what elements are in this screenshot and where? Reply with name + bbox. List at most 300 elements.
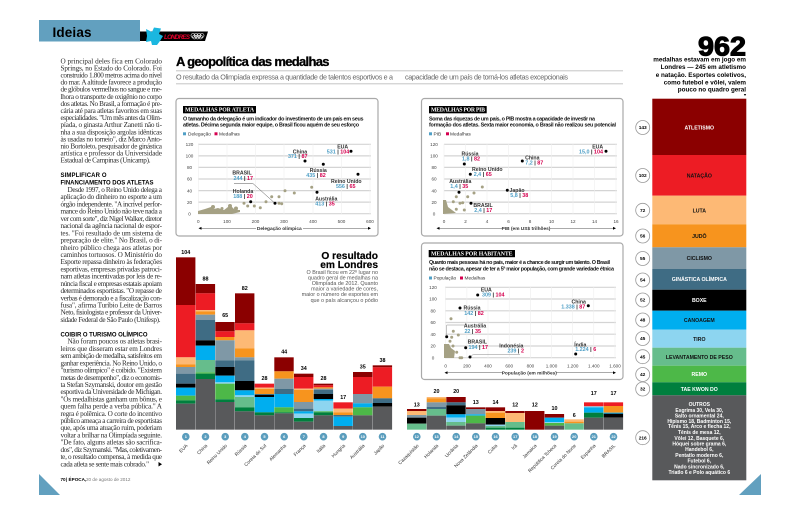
body text: first block <box>60 57 163 165</box>
scatter chart: delegation vs medals: 600 <box>366 219 374 224</box>
bar: Cazaquistão <box>407 409 426 430</box>
subtitle band: capacidade de um país de torná-los atletas excepcionais <box>405 72 568 82</box>
body text: third block: leiros que disseram estar em Londres <box>60 345 162 353</box>
sport medal count circles: 42 <box>640 372 646 378</box>
legend: Medalhas <box>464 276 486 282</box>
country labels: Holanda <box>423 443 440 460</box>
legend: Medalhas <box>450 131 471 137</box>
scatter chart: population vs medals: 1.600 <box>609 363 621 368</box>
bar totals: 10 <box>552 406 558 412</box>
body text: second block: caminhos tortuosos. O Ministério do <box>60 251 162 259</box>
body text: first block: às usadas no torneio", diz Marco Anto- <box>60 135 163 143</box>
scatter chart: delegation vs medals <box>186 142 374 224</box>
corner triangle right <box>739 474 761 495</box>
footer: page number and date: | ÉPOCA, <box>66 475 86 482</box>
bar totals: 34 <box>301 366 307 372</box>
rank circles: 2 <box>204 434 207 439</box>
segment: canoagem: CANOAGEM <box>684 318 715 324</box>
segment: remo <box>652 366 746 382</box>
scatter chart: population vs medals: 0 <box>432 355 435 360</box>
footer: page number and date: 20 de agosto de 2012 <box>86 477 131 482</box>
country labels: Coreia do Norte <box>550 443 578 471</box>
bar: Hungria <box>333 402 353 430</box>
bar totals: 13 <box>473 400 479 406</box>
rank circles: 13 <box>434 434 439 439</box>
scatter chart: population vs medals: 100 <box>429 297 437 302</box>
scatter chart: GDP vs medals: 60 <box>431 177 437 182</box>
segment: natação <box>652 155 746 196</box>
scatter chart: delegation vs medals: 0 <box>188 211 191 216</box>
title: A geopolítica das medalhas <box>176 54 330 69</box>
segment: outros: Tênis de mesa 12, <box>678 430 721 436</box>
heading: O resultado em Londres <box>320 251 378 271</box>
body text: second block: verbas é demorado e a fiscalização con- <box>60 294 163 302</box>
segment: ginástica olímpica <box>652 269 746 290</box>
segment: outros: Hóquei sobre grama 6, <box>672 442 727 448</box>
body text: first block: de glóbulos vermelhos no sangue e me- <box>60 86 163 94</box>
bar: Coreia do Sul <box>255 384 274 430</box>
bar: França <box>294 374 313 430</box>
body text: third block: sem ambição de medalha, satisfeitos em <box>60 352 162 360</box>
bar totals: 17 <box>340 395 346 401</box>
panel: medalhas por PIB <box>422 98 623 236</box>
scatter chart: delegation vs medals: 20 <box>187 200 192 205</box>
body text: second block: preparação de elite." No Brasil, o di- <box>60 236 163 244</box>
segment: outros: Tênis 15, Arco e flecha 12, <box>668 424 731 430</box>
segment: luta: LUTA <box>693 208 706 214</box>
scatter chart: delegation vs medals: 500 <box>338 219 346 224</box>
rank circles: 6 <box>283 434 286 439</box>
rank circles: 19 <box>552 434 557 439</box>
country labels: Ucrânia <box>444 443 460 459</box>
panel: medalhas por habitante <box>422 243 623 380</box>
scatter chart: delegation vs medals: Rússia <box>310 168 327 174</box>
bar: Brasil <box>604 402 623 430</box>
sport medal count circles: 56 <box>640 234 646 240</box>
sport medal count circles: 54 <box>640 278 646 284</box>
scatter chart: GDP vs medals: 0 <box>443 219 446 224</box>
scatter chart: GDP vs medals: 6 <box>507 219 510 224</box>
rank circles: 11 <box>380 434 385 439</box>
rank circles: 17 <box>513 434 517 439</box>
bar: Coreia do Norte <box>564 419 584 430</box>
text block: O resultado em Londres: O Brasil ficou em 22º lugar no <box>307 270 378 276</box>
body text: third block: quem falha perde a verba pública." A <box>60 403 163 411</box>
rank circles: 1 <box>185 434 188 439</box>
body text: first block: lhora o transporte de oxigênio no corpo <box>60 93 162 101</box>
body text: first block: nha a sua disposição argolas idênticas <box>60 128 162 136</box>
segment: natação: NATAÇÃO <box>687 172 712 180</box>
body text: third block: regra é polêmica. O corte do incentivo <box>60 410 162 418</box>
scatter chart: GDP vs medals: 10 <box>549 219 554 224</box>
text block: 962 caption: Londres — 245 em atletismo <box>661 64 746 71</box>
scatter chart: population vs medals: 200 <box>463 363 471 368</box>
segment: outros: OUTROS <box>689 402 711 408</box>
sport medal count circles: 216 <box>639 435 647 441</box>
body text: second block: tes. "Foi resultado de um sistema de <box>60 229 162 237</box>
body text: second block: determinados esportistas. "O repasse de <box>60 287 162 295</box>
sport medal count circles: 48 <box>640 318 646 324</box>
body text: second block: sidade Federal de São Paulo (Unifesp). <box>60 316 161 324</box>
panel title: MEDALHAS POR PIB <box>431 108 485 114</box>
panel: medalhas por atleta <box>176 98 378 236</box>
bar totals: 17 <box>591 391 597 397</box>
scatter chart: GDP vs medals: 5,8 | 38 <box>510 193 528 199</box>
segment: atletismo <box>652 99 746 155</box>
bar: República Tcheca <box>545 414 564 430</box>
body text: second block: Desde 1997, o Reino Unido delega a <box>68 186 163 194</box>
axis arrow: PIB: PIB (em US$ trilhões) <box>502 226 551 232</box>
scatter chart: population vs medals: 142 | 82 <box>464 311 484 317</box>
segment: atletismo: ATLETISMO <box>685 126 714 132</box>
body text: third block: metas de desempenho", diz o economis- <box>60 374 163 382</box>
body text: third block: "turismo olímpico" é coibido. "Existem <box>60 366 162 374</box>
segment: levantamento de peso <box>652 348 746 366</box>
segment: ciclismo: CICLISMO <box>687 256 712 262</box>
body text: first block: nio Bortoleto, pesquisador de ginástica <box>60 142 163 150</box>
panel description: Quanto mais pessoas há no país, maior é a chance de surgir um talento. O Brasil <box>429 260 610 266</box>
scatter chart: population vs medals: 1.200 <box>567 363 579 368</box>
body text: first block: Estadual de Campinas (Unicamp). <box>60 157 151 165</box>
footer: page number and date <box>60 475 131 482</box>
segment: judô: JUDÔ <box>692 232 707 240</box>
scatter chart: GDP vs medals <box>430 142 619 224</box>
segment: boxe <box>652 290 746 311</box>
segment: outros: Pentatlo moderno 6, <box>675 453 724 459</box>
subheading: Simplificar o financiamento: FINANCIAMENTO DOS ATLETAS <box>60 181 154 187</box>
body text: third block: ta Stefan Szymanski, doutor em gestão <box>60 381 162 389</box>
logo: Londres 2012 ribbon <box>140 28 208 45</box>
country labels: China <box>196 443 209 456</box>
bar totals: 104 <box>181 250 190 256</box>
scatter chart: population vs medals: 22 | 35 <box>464 329 481 335</box>
scatter chart: population vs medals: 60 <box>430 320 436 325</box>
country labels: EUA <box>178 443 190 454</box>
bar: Holanda <box>427 397 446 430</box>
scatter chart: population vs medals: 239 | 2 <box>507 349 524 355</box>
body text: first block: O principal deles fica em Colorado <box>60 57 162 65</box>
bar totals: 20 <box>434 389 440 395</box>
text block: O resultado em Londres: que o país alcançou o pódio <box>311 298 378 304</box>
country labels: Nova Zelândia <box>453 443 480 469</box>
rank circles: 12 <box>415 434 420 439</box>
segment: levantamento de peso: LEVANTAMENTO DE PESO <box>666 355 733 361</box>
panel title: MEDALHAS POR ATLETA <box>185 108 255 114</box>
body text: first block: especialidades. "Um mês antes da Olim- <box>60 114 163 122</box>
rank circles: 10 <box>361 434 365 439</box>
rank circles: 15 <box>474 434 479 439</box>
scatter chart: GDP vs medals: 8 <box>529 219 532 224</box>
scatter chart: GDP vs medals: Japão <box>510 188 524 194</box>
bar totals: 12 <box>532 403 538 409</box>
body text: first block: cária até para atletas favoritos em suas <box>60 107 162 115</box>
sport medal count circles: 32 <box>640 387 646 393</box>
scatter chart: population vs medals: 1.338 | 87 <box>561 305 585 311</box>
country labels: Coreia do Sul <box>243 443 268 468</box>
bar totals <box>414 389 616 419</box>
text block: O resultado em Londres: maior a variedade de cores, <box>311 287 378 293</box>
bar: Irã <box>505 411 525 430</box>
scatter chart: population vs medals: 600 <box>505 363 513 368</box>
legend <box>429 131 471 137</box>
scatter chart: GDP vs medals: 20 <box>431 200 437 205</box>
scatter chart: GDP vs medals: Rússia <box>461 152 479 158</box>
logo: Londres 2012 ribbon: LONDRES <box>164 34 191 41</box>
segment: remo: REMO <box>692 372 707 378</box>
segment: outros: Nado sincronizado 6, <box>674 464 725 470</box>
body text: third block <box>60 338 163 468</box>
body text: first block: dos atletas. No Brasil, a formação é pre- <box>60 100 163 108</box>
segment: outros: Esgrima 30, Vela 30, <box>675 408 724 414</box>
subtitle band <box>176 70 623 84</box>
scatter chart: delegation vs medals: China <box>293 150 307 156</box>
scatter chart: GDP vs medals: 1,4 | 35 <box>450 184 468 190</box>
text block: O resultado em Londres <box>302 270 379 304</box>
heading: O resultado em Londres: em Londres <box>320 260 378 271</box>
body text: first block: artística e professor da Universidade <box>60 150 162 158</box>
scatter chart: delegation vs medals: 200 <box>252 219 260 224</box>
bar: Cuba <box>486 407 505 430</box>
scatter chart: GDP vs medals: 16 <box>613 219 619 224</box>
sport medal count circles: 102 <box>639 173 647 179</box>
scatter chart: delegation vs medals: 80 <box>187 165 192 170</box>
bar: Rússia <box>235 293 254 430</box>
panel description: não se destaca, apesar de ter a 5ª maior população, com grande variedade étnica <box>429 266 615 272</box>
sport medal count circles: 45 <box>640 336 646 342</box>
scatter chart: population vs medals: BRASIL <box>468 340 488 346</box>
bar: Austrália <box>353 372 372 430</box>
country labels: Hungria <box>331 443 347 459</box>
scatter chart: population vs medals: 40 <box>430 332 436 337</box>
footer: page number and date: 70 <box>60 477 66 482</box>
rank circles: 9 <box>342 434 345 439</box>
rank circles <box>413 433 617 441</box>
scatter chart: delegation vs medals: 0 <box>197 219 200 224</box>
legend: Medalhas <box>219 131 240 137</box>
bar totals: 17 <box>610 391 616 397</box>
body text: second block: núncia fiscal e empresas estatais apoiam <box>60 280 162 288</box>
scatter chart: GDP vs medals: 80 <box>431 165 437 170</box>
bar: Espanha <box>584 402 603 430</box>
country labels: França <box>293 443 308 458</box>
body text: second block: Esporte repassa dinheiro às federações <box>60 258 162 266</box>
country labels: Espanha <box>580 443 598 461</box>
body text: third block: Não foram poucos os atletas brasi- <box>68 338 163 346</box>
rank circles: 7 <box>303 434 305 439</box>
body text: second block: órgão independente. "A incrível perfor- <box>60 200 163 208</box>
scatter chart: population vs medals: 1.400 <box>588 363 600 368</box>
scatter chart: delegation vs medals: 100 <box>223 219 231 224</box>
scatter chart: population vs medals: 309 | 104 <box>482 293 505 299</box>
bar totals: 20 <box>453 389 459 395</box>
scatter chart: delegation vs medals: 556 | 65 <box>336 184 355 190</box>
bar: Nova Zelândia <box>466 407 485 430</box>
bar totals: 35 <box>360 364 366 370</box>
sport medal count circles: 143 <box>639 125 647 131</box>
segment: luta <box>652 196 746 224</box>
country labels <box>397 443 617 474</box>
segment: ginástica olímpica: GINÁSTICA OLÍMPICA <box>672 275 727 283</box>
country labels: Austrália <box>349 443 367 461</box>
country labels: Reino Unido <box>206 443 229 466</box>
sport medal count circles: 52 <box>640 298 646 304</box>
bar: Ucrânia <box>446 397 466 430</box>
scatter chart: population vs medals: 400 <box>484 363 492 368</box>
scatter chart: delegation vs medals: 413 | 35 <box>315 202 335 208</box>
bar: Itália <box>314 384 333 430</box>
body text: third block: cada atleta se sente mais cobrado." <box>60 460 149 468</box>
bar totals: 28 <box>262 376 268 382</box>
body text: first block: construído 1.800 metros acima do nível <box>60 72 162 80</box>
bar: Jamaica <box>525 411 544 430</box>
body text: third block: "Os medalhistas ganham um bônus, e <box>60 395 162 403</box>
text block: 962 caption: pouco no quadro geral <box>678 86 746 93</box>
body text: third block: que, após uma atuação ruim, poderiam <box>60 424 162 432</box>
scatter chart: delegation vs medals: 531 | 104 <box>327 150 349 156</box>
scatter chart: delegation vs medals: EUA <box>337 144 348 150</box>
scatter chart: GDP vs medals: 1,8 | 82 <box>462 157 480 163</box>
rank circles: 16 <box>493 434 498 439</box>
scatter chart: population vs medals: 194 | 17 <box>469 345 488 351</box>
segment: outros: Triatlo 6 e Polo aquático 6 <box>668 470 730 476</box>
body text: second block: esportivas, empresas privadas patroci- <box>60 265 163 273</box>
segment: outros: Handebol 6, <box>685 447 714 453</box>
scatter chart: population vs medals: 800 <box>527 363 535 368</box>
section tab: Ideias <box>39 20 140 42</box>
body text: third block: te, o resultado compensa, à medida que <box>60 453 162 461</box>
scatter chart: GDP vs medals: Reino Unido <box>472 167 503 173</box>
scatter chart: population vs medals: EUA <box>481 288 492 294</box>
axis arrow: delegação olímpica: Delegação olímpica <box>257 226 302 232</box>
scatter chart: GDP vs medals: EUA <box>592 144 603 150</box>
axis arrow: população <box>444 370 616 376</box>
scatter chart: GDP vs medals: 120 <box>430 142 438 147</box>
scatter chart: GDP vs medals: 2,4 | 17 <box>474 208 492 214</box>
scatter chart: delegation vs medals: 300 <box>280 219 288 224</box>
rank circles <box>182 433 386 441</box>
panel description <box>183 116 364 128</box>
country labels: República Tcheca <box>527 443 558 474</box>
body text: first block: píada, o ginasta Arthur Zanetti não ti- <box>60 121 163 129</box>
country labels: Irã <box>511 443 519 451</box>
segment: tae kwon do <box>652 382 746 395</box>
country labels: Alemanha <box>268 443 288 463</box>
text block: 962 caption <box>653 56 746 93</box>
rank circles: 22 <box>611 434 616 439</box>
segment: canoagem <box>652 311 746 330</box>
scatter chart: delegation vs medals: 100 <box>186 154 194 159</box>
text block: O resultado em Londres: quadro geral de medalhas na <box>308 276 378 282</box>
scatter chart: delegation vs medals: 120 <box>186 142 194 147</box>
scatter chart: GDP vs medals: 7,2 | 87 <box>525 161 543 167</box>
scatter chart: population vs medals: 1.224 | 6 <box>575 347 596 353</box>
panel description: formação dos atletas. Sexta maior economia, o Brasil não realizou seu potencial <box>429 122 616 128</box>
section tab: Ideias: Ideias <box>52 25 92 40</box>
body text: second block: nacional da agência nacional de espor- <box>60 222 163 230</box>
scatter chart: population vs medals: China <box>571 300 586 306</box>
body text: second block: ver com sorte", diz Nigel Walker, diretor <box>60 215 163 223</box>
scatter chart: population vs medals: Indonésia <box>499 344 524 350</box>
scatter chart: delegation vs medals: 244 | 17 <box>234 176 253 182</box>
scatter chart: population vs medals: 80 <box>430 308 436 314</box>
legend: Delegação <box>188 131 211 137</box>
body text: third block: esportiva da Universidade de Michigan. <box>60 388 162 396</box>
bar totals: 38 <box>380 358 386 364</box>
segment: ciclismo <box>652 247 746 269</box>
scatter chart: GDP vs medals: 14 <box>592 219 597 224</box>
scatter chart: delegation vs medals: 188 | 20 <box>233 194 253 200</box>
country labels: Jamaica <box>522 443 539 460</box>
country labels: Rússia <box>234 443 249 458</box>
segment: judô <box>652 224 746 247</box>
subheading: Simplificar o financiamento <box>60 173 154 187</box>
sport medal count circles: 72 <box>640 208 646 214</box>
axis arrow: população: População (em milhões) <box>502 370 557 376</box>
scatter chart: GDP vs medals: China <box>525 156 540 162</box>
panel description: O tamanho da delegação é um indicador do investimento de um país em seus <box>183 116 364 122</box>
text block: O resultado em Londres: maior o número de esportes em <box>302 292 379 298</box>
bar: China <box>196 284 215 430</box>
scatter chart: delegation vs medals: 40 <box>187 188 192 193</box>
bar totals: 65 <box>222 313 228 319</box>
panel description <box>429 260 615 272</box>
scatter chart: population vs medals: 0 <box>444 363 447 368</box>
rank circles: 18 <box>533 434 538 439</box>
bar totals: 44 <box>281 350 287 356</box>
subheading: Coibir o turismo olímpico: COIBIR O TURISMO OLÍMPICO <box>60 330 148 338</box>
scatter chart: delegation vs medals: Holanda <box>233 189 253 195</box>
body text: second block: mance do Reino Unido não teve nada a <box>60 208 163 216</box>
body text: first block: Springs, no Estado do Colorado. Foi <box>60 64 162 72</box>
body text: third block: dos", diz Szymanski. "Mas, coletivamen- <box>60 446 163 454</box>
scatter chart: population vs medals: 20 <box>430 344 436 349</box>
scatter chart: GDP vs medals: Austrália <box>449 179 472 185</box>
sport medal count circles: 55 <box>640 256 646 262</box>
panel description <box>429 116 616 128</box>
body text: third block: voltar a brilhar na Olimpíada seguinte. <box>60 431 162 439</box>
segment: tae kwon do: TAE KWON DO <box>681 387 718 393</box>
segment: boxe: BOXE <box>692 298 707 304</box>
country labels: Japão <box>373 443 386 457</box>
bar totals: 12 <box>512 403 518 409</box>
scatter chart: delegation vs medals: Austrália <box>315 196 338 202</box>
panel description: Soma das riquezas de um país, o PIB mostra a capacidade de investir na <box>429 116 596 122</box>
scatter chart: GDP vs medals: 2 <box>464 219 467 224</box>
axis arrow: PIB <box>436 225 616 232</box>
sport medal count circles: 45 <box>640 354 646 360</box>
segment: tiro <box>652 330 746 348</box>
scatter chart: delegation vs medals: 400 <box>309 219 317 224</box>
rank circles: 21 <box>592 434 597 439</box>
scatter chart: delegation vs medals: 60 <box>187 177 192 182</box>
scatter chart: GDP vs medals: 100 <box>430 154 438 159</box>
bar totals: 82 <box>242 286 248 292</box>
bar totals: 13 <box>414 403 420 409</box>
panel description: atletas. Décima segunda maior equipe, o Brasil ficou aquém de seu esforço <box>183 122 360 128</box>
panel title: MEDALHAS POR HABITANTE <box>431 252 513 258</box>
scatter chart: GDP vs medals: 12 <box>570 219 576 224</box>
body text: third block: "De fato, alguns atletas são sacrifica- <box>60 439 163 447</box>
bar totals: 88 <box>202 276 208 282</box>
body text: second block: nheiro público chega aos atletas por <box>60 244 163 252</box>
text block: O resultado em Londres: Olimpíada de 2012. Quanto <box>312 281 378 287</box>
body text: third block: ganhar experiência. No Reino Unido, o <box>60 359 162 367</box>
scatter chart: population vs medals: 120 <box>429 285 437 290</box>
stacked column: medals by sport <box>652 99 746 480</box>
subtitle band: O resultado da Olimpíada expressa a quantidade de talentos esportivos e a <box>176 72 393 82</box>
country labels: Cuba <box>487 443 499 456</box>
scatter chart: delegation vs medals: Reino Unido <box>331 179 362 185</box>
